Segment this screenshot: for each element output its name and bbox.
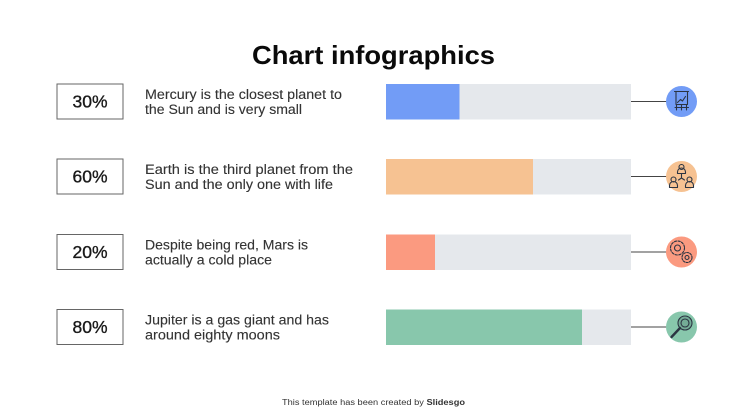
- bar: 30%: [386, 84, 631, 120]
- description: Jupiter: around eighty moons: [145, 328, 280, 342]
- percentage box: 80%: 80%: [72, 317, 108, 337]
- icon: magnifying glass: [666, 312, 697, 342]
- row: Earth: [57, 159, 697, 194]
- percentage box: 60%: 60%: [72, 166, 108, 186]
- row: Mars: [57, 234, 697, 270]
- percentage box: 60%: [57, 159, 123, 194]
- bar: 80%: [386, 310, 631, 345]
- connector line: [631, 251, 667, 253]
- connector line: [631, 100, 667, 102]
- connector line: [631, 326, 667, 328]
- percentage box: 30%: 30%: [72, 92, 108, 112]
- icon: presentation board: [666, 86, 697, 117]
- footer credit: This template has been created by Slidesgo: [282, 398, 465, 407]
- description: Mercury: Mercury is the closest planet to: [145, 87, 342, 102]
- description: Earth: [145, 162, 353, 192]
- icon: team network: [666, 161, 697, 192]
- bar: 20%: [386, 234, 631, 270]
- description: Mars: actually a cold place: [145, 252, 272, 268]
- title: Chart infographics: [252, 40, 495, 70]
- percentage box: 30%: [57, 84, 123, 119]
- icon: gears: [666, 236, 697, 268]
- description: Mars: Despite being red, Mars is: [145, 238, 308, 252]
- row: Jupiter: [57, 310, 697, 345]
- description: Mars: [145, 238, 308, 268]
- description: Mercury: [145, 87, 342, 117]
- percentage box: 20%: 20%: [72, 242, 108, 262]
- description: Jupiter: [145, 312, 329, 342]
- description: Earth: Sun and the only one with life: [145, 177, 333, 192]
- bar: 60%: [386, 159, 631, 194]
- description: Jupiter: Jupiter is a gas giant and has: [145, 312, 329, 328]
- row: Mercury: [57, 84, 697, 120]
- connector line: [631, 176, 667, 178]
- percentage box: 20%: [57, 234, 123, 270]
- percentage box: 80%: [57, 310, 123, 344]
- description: Mercury: the Sun and is very small: [145, 102, 302, 117]
- description: Earth: Earth is the third planet from the: [145, 162, 353, 177]
